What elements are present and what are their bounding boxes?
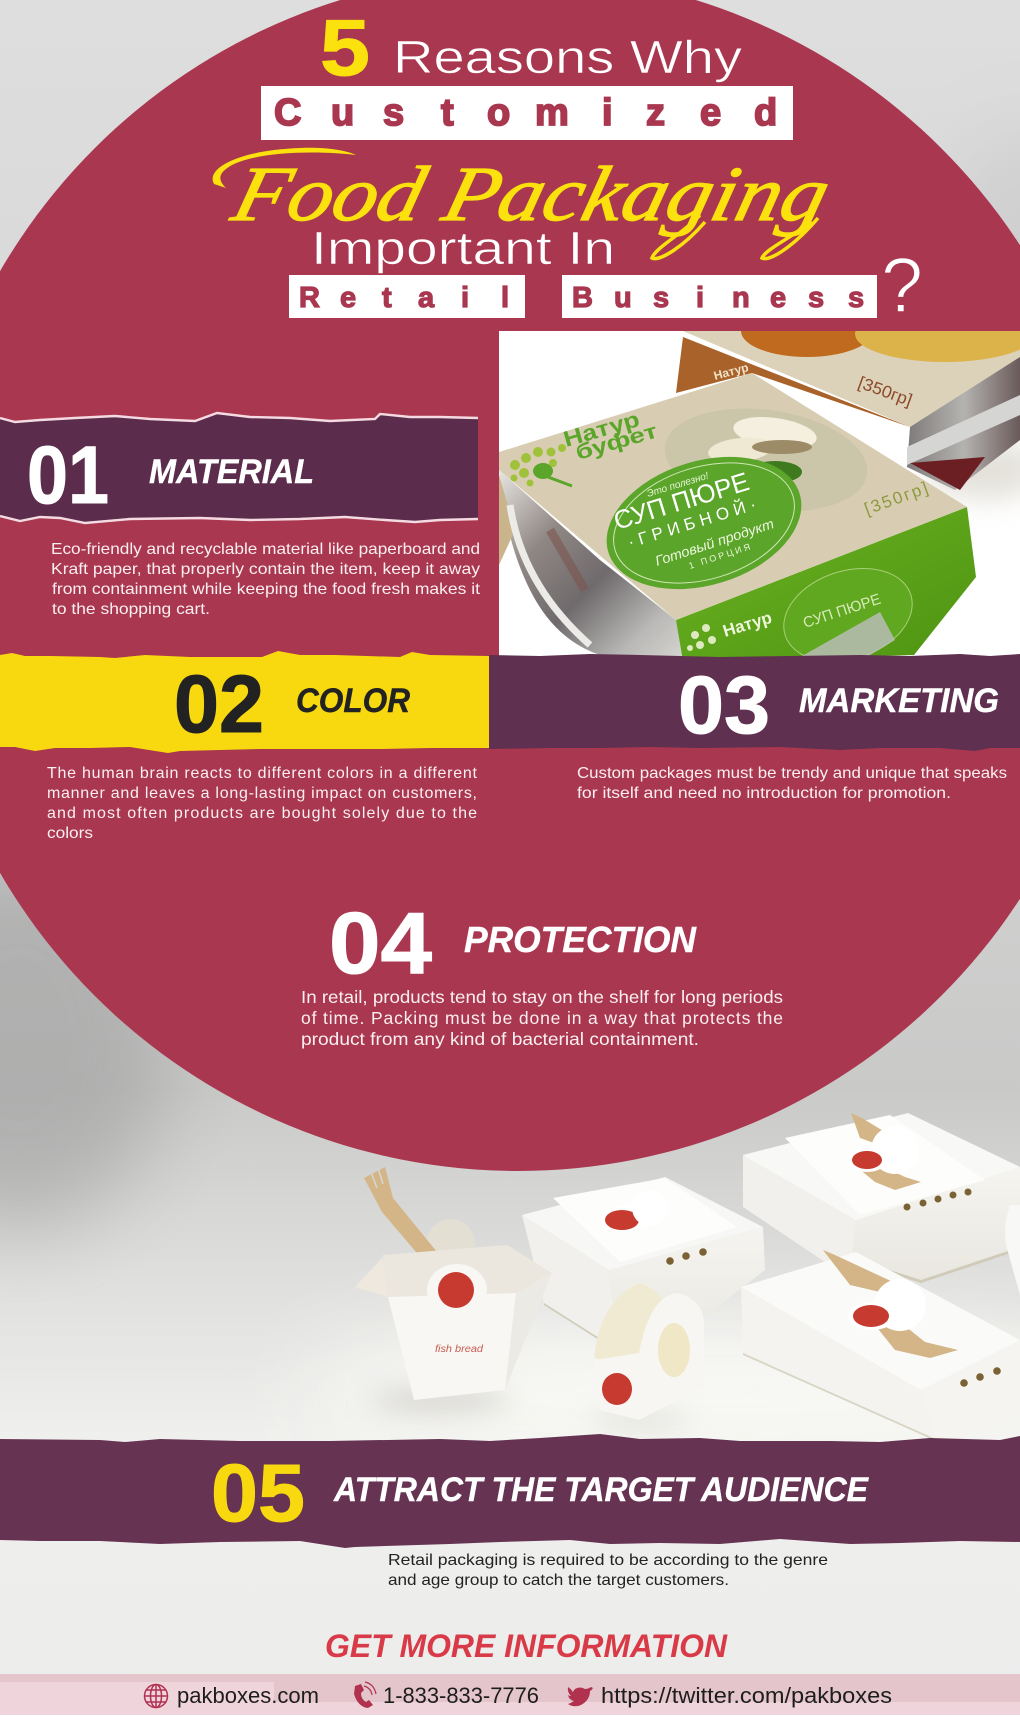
number 01: 01 [27, 430, 109, 521]
seal ready label: Готовый продукт [653, 515, 776, 569]
title box: Customized: Customized [274, 92, 777, 134]
mushrooms [708, 417, 817, 480]
box: middle [522, 1177, 765, 1352]
front kraft sleeve [499, 373, 967, 620]
side product: СУП ПЮРЕ [801, 591, 883, 632]
title line: Important In: Important In [311, 222, 615, 274]
body text 03 [577, 765, 1007, 802]
body text 04: of time. Packing must be done in a way that protects the [301, 1008, 783, 1028]
takeaway box brand: fish bread [435, 1344, 483, 1355]
body text 01: to the shopping cart. [52, 601, 210, 618]
title numeral: 5 [320, 3, 370, 92]
title box: Business: Business [572, 282, 864, 314]
website: pakboxes.com [177, 1683, 319, 1708]
body text 02 [47, 765, 478, 842]
panel: 01 material [0, 413, 481, 618]
body text 04: In retail, products tend to stay on the shelf for long periods [301, 987, 783, 1007]
seal portion label: 1 ПОРЦИЯ [688, 542, 751, 571]
heading: color: COLOR [296, 682, 410, 720]
front green side [676, 507, 976, 661]
number 02: 02 [174, 659, 264, 750]
body text 02: manner and leaves a long-lasting impact on customers, [47, 785, 477, 802]
body text 05: and age group to catch the target customers. [388, 1572, 729, 1589]
seal tagline: Это полезно! [646, 471, 710, 500]
back package weight label: [350гр] [856, 373, 915, 410]
back package brand: Натур [712, 360, 750, 383]
photo: white food boxes with wooden cutlery [355, 1113, 1020, 1445]
seal product name second line: ·ГРИБНОЙ· [626, 494, 761, 552]
seal product name: СУП ПЮРЕ [610, 466, 753, 536]
fork in the takeaway box [364, 1167, 474, 1252]
logo word one: Натур [560, 406, 642, 452]
body text 04 [301, 987, 783, 1049]
body text 02: and most often products are bought solely due to the [47, 805, 477, 822]
title block [213, 3, 923, 329]
front weight label: [350гр] [862, 478, 930, 519]
phone number: 1-833-833-7776 [383, 1683, 539, 1708]
banner 01 [0, 413, 478, 523]
panel: 04 protection [301, 895, 783, 1049]
icon: phone [354, 1682, 376, 1708]
heading: attract the target audience: ATTRACT THE TARGET AUDIENCE [333, 1471, 869, 1509]
body text 01 [51, 541, 481, 618]
heading: marketing: MARKETING [799, 682, 999, 720]
number 03: 03 [678, 660, 770, 751]
body text 03: for itself and need no introduction for promotion. [577, 785, 951, 802]
box: front right [741, 1250, 1020, 1445]
side brand: Натур [721, 608, 774, 641]
logo word two: буфет [573, 420, 660, 465]
number 04: 04 [329, 895, 432, 992]
title line: Reasons Why: Reasons Why [393, 31, 742, 83]
body text 05 [388, 1552, 828, 1589]
body text 01: Kraft paper, that properly contain the item, keep it away [51, 561, 480, 578]
panel: 05 attract the target audience [0, 1434, 1020, 1589]
banner 02 [0, 651, 489, 753]
body text 05: Retail packaging is required to be according to the genre [388, 1552, 828, 1569]
body text 02: colors [47, 825, 93, 842]
side circle and window [687, 568, 913, 656]
body text 03: Custom packages must be trendy and unique that speaks [577, 765, 1007, 782]
number 05: 05 [211, 1448, 305, 1539]
title script: Food Packaging [213, 148, 838, 259]
icon: globe [144, 1684, 168, 1708]
title box: Retail [289, 275, 525, 318]
call to action: GET MORE INFORMATION [325, 1628, 728, 1664]
box: top right [743, 1113, 1020, 1283]
icon: twitter bird [568, 1687, 593, 1706]
banner 05 [0, 1434, 1020, 1548]
title question mark: ? [881, 241, 923, 329]
small cup holder [594, 1283, 704, 1420]
maroon circle panel [0, 0, 1020, 1171]
back package [676, 305, 1020, 500]
front bowl glass [499, 470, 682, 656]
title box: Retail: Retail [299, 282, 509, 314]
green product seal [606, 456, 802, 590]
body text 04: product from any kind of bacterial containment. [301, 1029, 699, 1049]
body text 01: from containment while keeping the food fresh makes it [52, 581, 481, 598]
body text 01: Eco-friendly and recyclable material like paperboard and [51, 541, 480, 558]
title script: Food Packaging: Food Packaging [223, 151, 838, 238]
paper cup edge [1005, 1205, 1020, 1295]
soup window [665, 408, 867, 511]
logo: brand tree [510, 416, 656, 488]
heading: material: MATERIAL [149, 453, 314, 491]
floor shadows [370, 1390, 690, 1428]
banner 03 [489, 654, 1020, 751]
heading: protection: PROTECTION [464, 919, 697, 960]
panel: 02 color [0, 651, 489, 842]
twitter url: https://twitter.com/pakboxes [601, 1683, 892, 1708]
takeaway box [355, 1245, 552, 1400]
panel: 03 marketing [489, 654, 1020, 802]
title box: Business [562, 275, 877, 318]
photo: kraft soup packaging [499, 331, 1020, 657]
footer contact strip [0, 1674, 1020, 1715]
body text 02: The human brain reacts to different colors in a different [47, 765, 478, 782]
